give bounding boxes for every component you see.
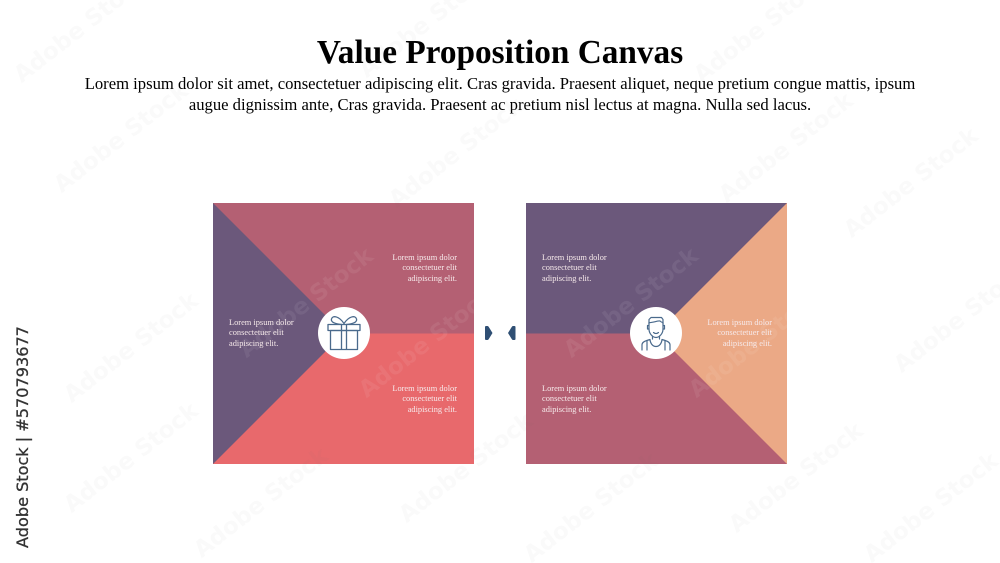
text: top left (542, 252, 607, 283)
watermarks: Adobe Stock (839, 123, 983, 243)
intro text: augue dignissim ante, Cras gravida. Praesent ac pretium nisl lectus at magna. Nulla sed lacus. (189, 95, 811, 114)
text: top right: adipiscing elit. (408, 274, 457, 283)
text: bottom left: adipiscing elit. (542, 405, 591, 414)
text: left: adipiscing elit. (229, 339, 278, 348)
panel: customer profile square (526, 203, 787, 464)
text: bottom right (392, 384, 457, 414)
text: bottom right: consectetuer elit (402, 394, 457, 403)
watermarks: Adobe Stock (234, 243, 378, 363)
text: top left: Lorem ipsum dolor (542, 252, 607, 262)
watermarks: Adobe Stock (684, 283, 828, 403)
watermarks: Adobe Stock (354, 283, 498, 403)
title: Value Proposition Canvas (317, 34, 683, 71)
stock id side text: Adobe Stock | #570793677 (13, 326, 32, 548)
icon: person in white circle (630, 307, 682, 359)
text: top right (392, 252, 457, 283)
icon: left arrowhead (485, 326, 492, 340)
watermarks: Adobe Stock (49, 78, 193, 198)
text: bottom left: consectetuer elit (542, 394, 597, 403)
text: right: consectetuer elit (717, 328, 772, 337)
text: left (229, 318, 294, 348)
watermarks: Adobe Stock (59, 398, 203, 518)
watermarks: Adobe Stock (724, 418, 868, 538)
watermarks: Adobe Stock (714, 88, 858, 208)
intro text (85, 74, 916, 114)
watermarks: Adobe Stock (394, 408, 538, 528)
text: bottom right: adipiscing elit. (408, 405, 457, 414)
watermarks: Adobe Stock (59, 288, 203, 408)
text: top left: consectetuer elit (542, 263, 597, 272)
customer profile segments (526, 203, 787, 464)
value map segments (213, 203, 474, 464)
panel: value map square (213, 203, 474, 464)
text: left: Lorem ipsum dolor (229, 318, 294, 326)
text: bottom left (542, 384, 607, 414)
text: right: adipiscing elit. (723, 339, 772, 348)
watermarks: Adobe Stock (189, 443, 333, 563)
text: top right: consectetuer elit (402, 263, 457, 272)
intro text: Lorem ipsum dolor sit amet, consectetuer adipiscing elit. Cras gravida. Praesent aliquet, neque pretium congue mattis, ipsum (85, 74, 915, 93)
text: top right: Lorem ipsum dolor (392, 252, 457, 262)
text: right (707, 318, 772, 348)
text: bottom left: Lorem ipsum dolor (542, 384, 607, 392)
text: left: consectetuer elit (229, 328, 284, 337)
watermarks: Adobe Stock (559, 243, 703, 363)
text: bottom right: Lorem ipsum dolor (392, 384, 457, 392)
text: right: Lorem ipsum dolor (707, 318, 772, 326)
text: top left: adipiscing elit. (542, 274, 591, 283)
watermarks: Adobe Stock (384, 93, 528, 213)
icon: right arrowhead (508, 326, 516, 340)
icon: gift in white circle (318, 307, 370, 359)
